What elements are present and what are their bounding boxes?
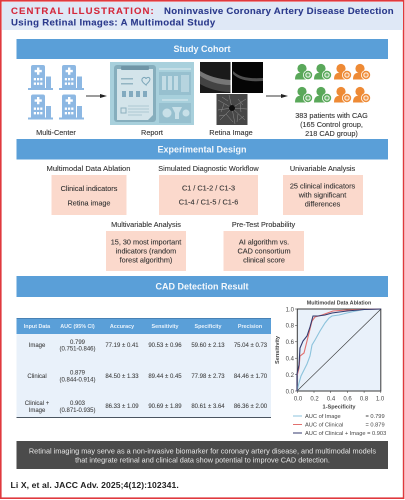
table: model performance: Clinical (27, 374, 47, 380)
panel: univariable analysis: 25 clinical indicators (290, 182, 355, 190)
table: model performance: 90.53 ± 0.96 (148, 343, 182, 349)
table: model performance: Specificity (195, 324, 221, 330)
title (2, 2, 403, 30)
chart: ROC curves: 1-Specificity (323, 404, 356, 410)
table: model performance: 77.19 ± 0.41 (105, 343, 139, 349)
chart: ROC curves: 0.4 (327, 396, 336, 402)
panel: simulated diagnostic workflow (158, 164, 259, 215)
label: multi-center: Multi-Center (36, 128, 76, 137)
table: model performance: 80.61 ± 3.64 (191, 404, 225, 410)
panel: pre-test probability: CAD consortium (237, 246, 291, 256)
text: patient counts: (165 Control group, (300, 120, 363, 129)
retina image: angiography (216, 94, 248, 125)
table: model performance: 77.98 ± 2.73 (191, 374, 225, 380)
chart legend: AUC of Clinical + Image = 0.903 (305, 431, 386, 437)
table: model performance: (0.751-0.846) (59, 346, 96, 352)
panel: multimodal data ablation: Multimodal Data Ablation (46, 164, 130, 173)
panel: multivariable analysis: 15, 30 most important (111, 238, 181, 246)
heading: study cohort (16, 39, 388, 59)
chart: ROC curves: 0.8 (286, 324, 295, 330)
title: Noninvasive Coronary Artery Disease Detection (164, 6, 394, 17)
panel: pre-test probability: Pre-Test Probability (232, 220, 295, 229)
table: model performance: AUC (95% CI) (60, 324, 95, 330)
table: model performance: Image (29, 408, 46, 414)
heading: experimental design (16, 139, 388, 160)
table: model performance (16, 318, 271, 418)
table: model performance: Input Data (24, 324, 51, 330)
arrow: centers to report (86, 94, 107, 98)
table: model performance: (0.871-0.935) (59, 408, 96, 414)
chart: ROC curves: 0.0 (286, 389, 295, 395)
table: model performance: 59.60 ± 2.13 (191, 343, 225, 349)
label: retina image: Retina Image (209, 128, 253, 137)
table: model performance: Sensitivity (152, 324, 178, 330)
table: model performance: 84.46 ± 1.70 (234, 374, 268, 380)
text: patient counts: 218 CAD group) (305, 129, 358, 138)
report illustration (110, 62, 194, 125)
table: model performance: Clinical + (25, 401, 50, 407)
table: model performance: 89.44 ± 0.45 (148, 374, 182, 380)
table: model performance: Image (29, 343, 46, 349)
table: model performance: 84.50 ± 1.33 (105, 374, 139, 380)
heading: experimental design: Experimental Design (157, 144, 247, 154)
citation: Li X, et al. JACC Adv. 2025;4(12):102341. (10, 480, 179, 490)
panel: univariable analysis: Univariable Analysis (290, 164, 355, 173)
table: model performance: (0.844-0.914) (59, 378, 96, 384)
chart: ROC curves: 1.0 (376, 396, 385, 402)
chart: ROC curves: 0.0 (294, 396, 303, 402)
heading: study cohort: Study Cohort (174, 44, 230, 54)
table: model performance: 0.799 (70, 340, 86, 346)
panel: simulated diagnostic workflow: C1 / C1-2 / C1-3 (182, 184, 235, 192)
table: model performance: 86.36 ± 2.00 (234, 404, 268, 410)
chart legend (293, 414, 386, 437)
table: model performance: 0.903 (70, 401, 86, 407)
panel: univariable analysis: with significant (298, 190, 346, 200)
heading: CAD detection result: CAD Detection Result (155, 282, 249, 292)
panel: multimodal data ablation (46, 164, 130, 215)
panel: multivariable analysis: Multivariable Analysis (111, 220, 181, 229)
chart legend: = 0.799 (366, 414, 385, 420)
text: patient counts (295, 111, 368, 138)
chart legend: AUC of Clinical (305, 422, 343, 428)
panel: simulated diagnostic workflow: C1-4 / C1-5 / C1-6 (179, 198, 238, 206)
retina image: OCT one (200, 62, 230, 93)
panel: multivariable analysis: forest algorithm) (120, 256, 172, 264)
table: model performance: 75.04 ± 0.73 (234, 343, 268, 349)
table: model performance: 86.33 ± 1.09 (105, 404, 139, 410)
title: Using Retinal Images: A Multimodal Study (11, 18, 216, 28)
takeaway box: Retinal imaging may serve as a non-invasive biomarker for coronary artery disease, and multimodal models (29, 446, 376, 455)
chart legend: = 0.879 (366, 422, 385, 428)
chart legend: AUC of Image (305, 414, 341, 420)
label: report: Report (141, 128, 163, 137)
chart: ROC curves: 0.2 (286, 373, 295, 379)
chart: ROC curves: 0.8 (360, 396, 369, 402)
panel: univariable analysis (283, 164, 363, 215)
takeaway box: that integrate retinal and clinical data show potential to improve CAD detection. (75, 455, 330, 464)
retina image: OCT two (232, 62, 263, 93)
table: model performance: Accuracy (110, 324, 134, 330)
chart: ROC curves: Multimodal Data Ablation (307, 300, 371, 306)
table: model performance: 0.879 (70, 370, 86, 376)
chart: ROC curves (275, 300, 385, 410)
icon: patients (295, 64, 371, 103)
chart: ROC curves: 1.0 (286, 307, 295, 313)
panel: simulated diagnostic workflow: Simulated Diagnostic Workflow (158, 164, 259, 173)
panel: multimodal data ablation: Retina image (68, 198, 110, 208)
panel: pre-test probability: clinical score (243, 256, 285, 264)
takeaway box (16, 441, 388, 469)
chart: ROC curves: 0.6 (343, 396, 352, 402)
chart: ROC curves: 0.6 (286, 340, 295, 346)
text: patient counts: 383 patients with CAG (295, 111, 368, 120)
icon: hospitals (28, 65, 84, 120)
chart: ROC curves: 0.4 (286, 356, 295, 362)
panel: multimodal data ablation: Clinical indicators (61, 184, 118, 193)
panel: pre-test probability (224, 220, 304, 271)
chart: ROC curves: Sensitivity (275, 335, 281, 364)
panel: univariable analysis: differences (305, 200, 341, 208)
heading: CAD detection result (16, 276, 388, 297)
panel: multivariable analysis (106, 220, 186, 271)
table: model performance: 90.69 ± 1.89 (148, 404, 182, 410)
panel: multivariable analysis: indicators (random (116, 246, 176, 256)
arrow: images to patients (266, 94, 288, 98)
title: CENTRAL ILLUSTRATION: (11, 6, 155, 17)
table: model performance: Precision (238, 324, 262, 330)
chart: ROC curves: 0.2 (310, 396, 319, 402)
panel: pre-test probability: AI algorithm vs. (239, 238, 289, 246)
